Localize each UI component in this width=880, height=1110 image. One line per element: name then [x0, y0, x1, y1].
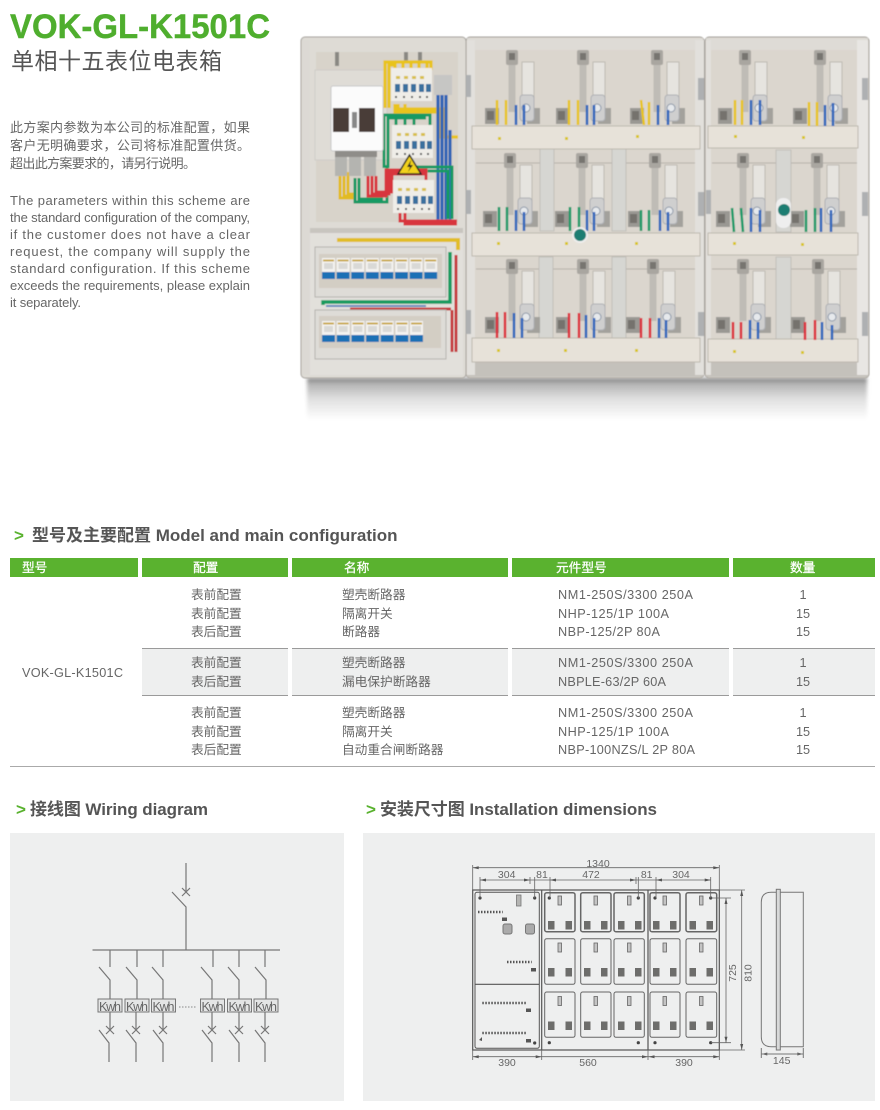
row group three: 表前配置 [191, 705, 242, 720]
dimension labels: 810 [742, 964, 754, 982]
row group three: 自动重合闸断路器 [342, 742, 444, 757]
row group two: NM1-250S/3300 250A [558, 656, 694, 670]
row group two: 表后配置 [191, 675, 242, 689]
text block: English description: if the customer does not have a clear [10, 227, 251, 242]
vertical straps [776, 150, 791, 339]
panel: installation dimensions [363, 833, 875, 1101]
row group one: 断路器 [342, 624, 380, 639]
row group one: 表前配置 [191, 606, 242, 621]
text block: English description: exceeds the requirements, please explain [10, 278, 250, 293]
row group two: 表前配置 [191, 655, 242, 670]
busbar [92, 949, 280, 951]
branch circuits [99, 950, 269, 1062]
indicator light [776, 198, 791, 228]
row group one: 15 [796, 625, 810, 639]
heading: wiring diagram: > [16, 800, 26, 819]
text block: English description: it separately. [10, 295, 81, 310]
wires: green bundle [355, 115, 452, 219]
mounting holes [478, 896, 712, 1045]
cell slots [558, 896, 703, 1006]
row group two: 1 [799, 656, 807, 670]
row group three: 15 [796, 743, 810, 757]
middle door: nine meter bays [466, 37, 704, 378]
dimension arrows [473, 866, 803, 1058]
table header: 型号 [22, 561, 47, 575]
shelf screws [497, 135, 639, 352]
row group one: 15 [796, 607, 810, 621]
dimension labels: 560 [579, 1057, 597, 1069]
shelves [708, 126, 858, 362]
row group one: NHP-125/1P 100A [558, 607, 670, 621]
heading: installation dimensions: 安装尺寸图 Installation dimensions [380, 800, 657, 819]
meter cells [545, 893, 717, 1037]
side view [761, 889, 803, 1058]
row group one: NM1-250S/3300 250A [558, 588, 694, 602]
table header [10, 558, 875, 577]
row group three: 隔离开关 [342, 724, 393, 739]
heading: model and main configuration: > [14, 526, 24, 545]
heading: model and main configuration: 型号及主要配置 Model and main configuration [32, 526, 398, 545]
row group one: 塑壳断路器 [342, 587, 406, 602]
text block: English description: request, the company will supply the [10, 244, 250, 259]
dimension labels: 81 [641, 869, 653, 881]
row group one: NBP-125/2P 80A [558, 625, 661, 639]
dimension labels: 145 [773, 1055, 791, 1067]
left cabinet components [478, 895, 536, 1042]
terminal modules [391, 68, 432, 101]
row group two: 漏电保护断路器 [342, 674, 431, 689]
row group three: 15 [796, 725, 810, 739]
main incoming switch [172, 863, 190, 950]
text block: Chinese description: 客户无明确要求，公司将标准配置供货。 [10, 138, 250, 153]
right door: six meter bays [705, 37, 869, 378]
kWh meters: Kwh [255, 1000, 277, 1014]
row group two: 塑壳断路器 [342, 655, 406, 670]
panel: wiring diagram [10, 833, 344, 1101]
row group one: 1 [799, 588, 807, 602]
text block: Chinese description: 此方案内参数为本公司的标准配置，如果 [10, 120, 250, 135]
kWh meters: Kwh [99, 1000, 121, 1014]
kWh meters: Kwh [126, 1000, 148, 1014]
title: VOK-GL-K1501C [10, 8, 270, 46]
shadow under cabinet [307, 378, 867, 420]
kWh meters: Kwh [202, 1000, 224, 1014]
dimension labels: 725 [727, 964, 739, 982]
hinges [466, 75, 704, 336]
cell terminals [548, 921, 713, 1030]
icon: warning triangle [398, 155, 421, 174]
shelf screws [733, 135, 805, 354]
indicator light [572, 227, 588, 243]
table header: 数量 [790, 561, 816, 575]
row group one: 表后配置 [191, 625, 242, 639]
row group one [191, 587, 810, 639]
product photo: meter box [301, 37, 869, 420]
dimension labels: 472 [582, 869, 600, 881]
row group three [191, 705, 810, 757]
dimension labels: 81 [536, 869, 548, 881]
table header: 元件型号 [556, 561, 607, 575]
row group three: 1 [799, 706, 807, 720]
breaker row two [315, 310, 446, 359]
left door: incoming and breakers [301, 37, 466, 378]
heading: wiring diagram: 接线图 Wiring diagram [30, 800, 208, 819]
kWh meters [98, 999, 278, 1014]
wires [497, 100, 649, 125]
table header: 名称 [344, 560, 370, 575]
kWh meters: Kwh [152, 1000, 175, 1014]
circuit breaker MCCB [331, 86, 383, 176]
table header: 配置 [193, 561, 218, 575]
row group three: 表后配置 [191, 743, 242, 757]
vertical straps [539, 149, 626, 338]
dimension labels: 390 [675, 1057, 693, 1069]
breaker row one [315, 247, 446, 297]
text block: English description: standard configuration. If this scheme [10, 261, 250, 276]
row group two [191, 655, 810, 689]
row group three: 表前配置 [191, 724, 242, 739]
kWh meters: Kwh [228, 1000, 251, 1014]
dimension labels: 1340 [586, 858, 610, 870]
model name: VOK-GL-K1501C [22, 666, 123, 680]
heading: installation dimensions: > [366, 800, 376, 819]
text block: English description [10, 193, 251, 310]
dimension labels [498, 858, 791, 1069]
wires: yellow bundle [385, 62, 458, 137]
row group three: NM1-250S/3300 250A [558, 706, 694, 720]
row group two: 15 [796, 675, 810, 689]
row group two: NBPLE-63/2P 60A [558, 675, 667, 689]
wires [735, 100, 817, 126]
dimension labels: 390 [498, 1057, 516, 1069]
text block: Chinese description [10, 120, 250, 171]
subtitle: 单相十五表位电表箱 [11, 48, 222, 74]
table: model and configuration [10, 558, 875, 766]
hinges [706, 78, 868, 336]
dimension labels: 304 [498, 869, 516, 881]
text block: English description: The parameters within this scheme are [10, 193, 250, 208]
lower panel: busbars [337, 240, 458, 250]
row group three: NBP-100NZS/L 2P 80A [558, 743, 696, 757]
row group three: 塑壳断路器 [342, 705, 406, 720]
shelves [472, 126, 700, 362]
text block: English description: the standard configuration of the company, [10, 210, 250, 225]
front view outline [473, 890, 719, 1050]
dimension labels: 304 [672, 869, 690, 881]
dimension lines [473, 865, 745, 1060]
table row group shading [10, 648, 875, 766]
row group three: NHP-125/1P 100A [558, 725, 670, 739]
text block: Chinese description: 超出此方案要求的，请另行说明。 [10, 156, 196, 171]
row group one: 隔离开关 [342, 606, 393, 621]
wires: red bundle [368, 170, 457, 224]
wires: blue bundle [438, 95, 450, 220]
row group one: 表前配置 [191, 587, 242, 602]
